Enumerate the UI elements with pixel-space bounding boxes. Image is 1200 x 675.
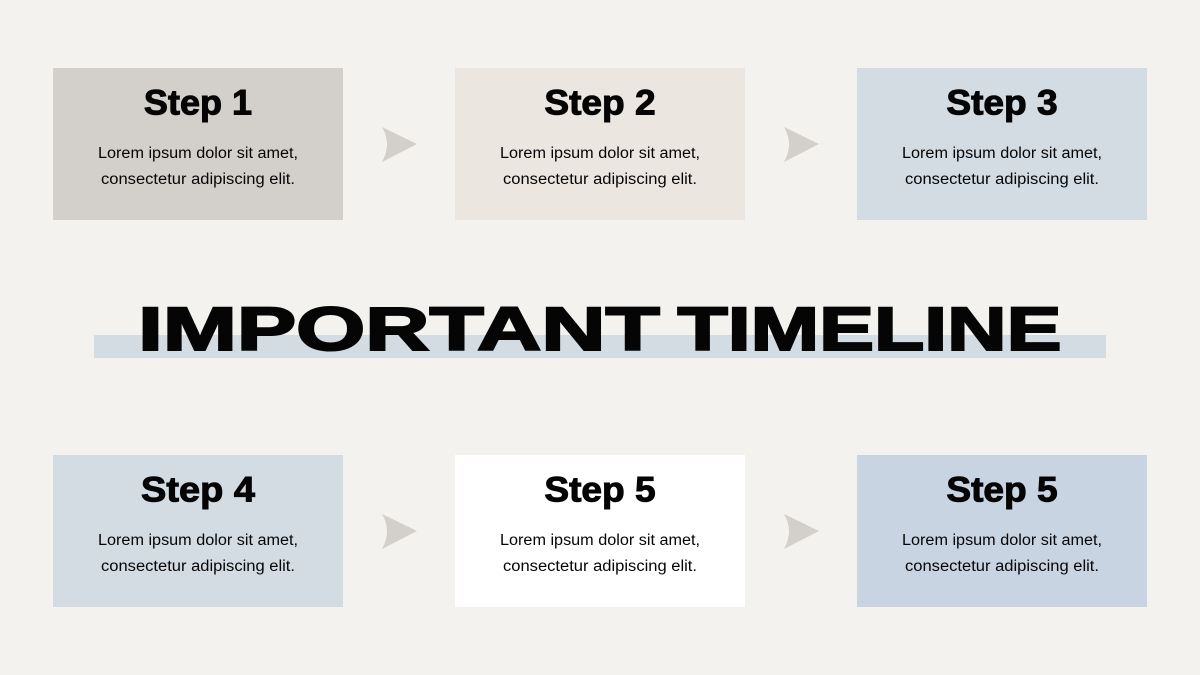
title text bbox=[138, 295, 1061, 364]
heading: step 4: Step 4 bbox=[141, 470, 256, 509]
text block: step 3 description bbox=[902, 145, 1102, 188]
title text: IMPORTANT bbox=[138, 296, 660, 364]
text block: step 4 description bbox=[98, 532, 298, 575]
arrow: step 2 to step 3 bbox=[784, 127, 819, 162]
title text: TIMELINE bbox=[678, 295, 1061, 363]
text block: step 2 description bbox=[500, 145, 700, 188]
heading: final step 5: Step 5 bbox=[946, 469, 1058, 509]
heading: step 3: Step 3 bbox=[946, 82, 1058, 122]
arrow: step 5 to final step 5 bbox=[784, 514, 819, 549]
text block: step 1 description: Lorem ipsum dolor sit amet, bbox=[98, 145, 298, 162]
title with highlight band bbox=[94, 295, 1106, 364]
panel: step 3 bbox=[857, 68, 1147, 220]
text block: step 3 description: consectetur adipiscing elit. bbox=[905, 171, 1099, 188]
text block: final step 5 description bbox=[902, 532, 1102, 575]
panel: step 5 blue bbox=[857, 455, 1147, 607]
text block: step 5 description: consectetur adipiscing elit. bbox=[503, 558, 697, 575]
panel: step 2 bbox=[455, 68, 745, 220]
text block: step 4 description: consectetur adipiscing elit. bbox=[101, 558, 295, 575]
text block: step 1 description: consectetur adipiscing elit. bbox=[101, 171, 295, 188]
text block: step 5 description: Lorem ipsum dolor sit amet, bbox=[500, 532, 700, 549]
heading: step 1: Step 1 bbox=[144, 83, 252, 122]
text block: final step 5 description: consectetur adipiscing elit. bbox=[905, 558, 1099, 575]
panel: step 1 bbox=[53, 68, 343, 220]
text block: step 1 description bbox=[98, 145, 298, 188]
text block: step 2 description: consectetur adipiscing elit. bbox=[503, 171, 697, 188]
arrow: step 4 to step 5 bbox=[382, 514, 417, 549]
text block: final step 5 description: Lorem ipsum dolor sit amet, bbox=[902, 532, 1102, 549]
text block: step 4 description: Lorem ipsum dolor sit amet, bbox=[98, 532, 298, 549]
text block: step 5 description bbox=[500, 532, 700, 575]
heading: step 2: Step 2 bbox=[544, 82, 656, 122]
heading: step 5: Step 5 bbox=[544, 469, 656, 509]
text block: step 2 description: Lorem ipsum dolor sit amet, bbox=[500, 145, 700, 162]
panel: step 4 bbox=[53, 455, 343, 607]
arrow: step 1 to step 2 bbox=[382, 127, 417, 162]
panel: step 5 white bbox=[455, 455, 745, 607]
text block: step 3 description: Lorem ipsum dolor sit amet, bbox=[902, 145, 1102, 162]
